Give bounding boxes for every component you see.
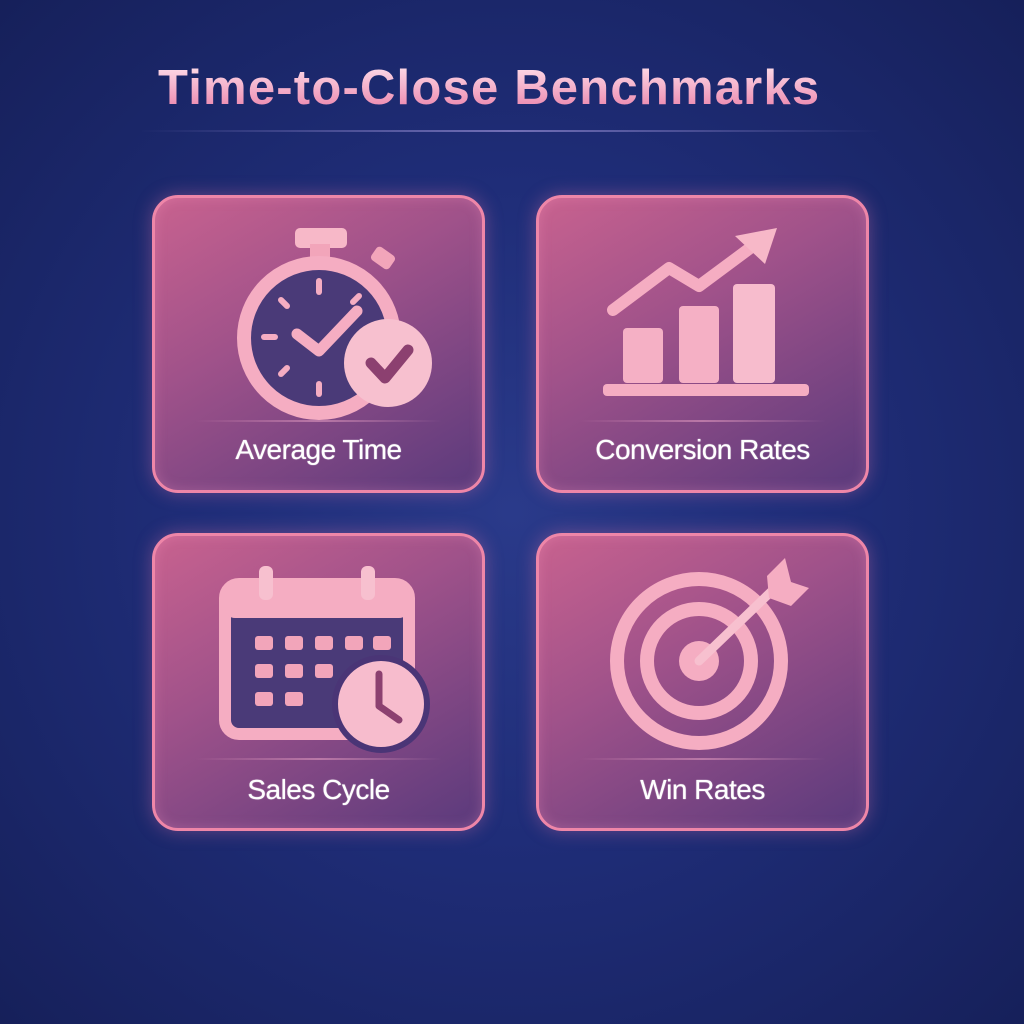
panel: sales cycle xyxy=(152,533,485,831)
icon: bar chart with arrow xyxy=(603,228,809,396)
label: Sales Cycle xyxy=(247,774,390,805)
label: Win Rates xyxy=(640,774,765,805)
title: Time-to-Close Benchmarks xyxy=(158,61,820,115)
icon: stopwatch with check xyxy=(237,228,432,420)
panel: average time xyxy=(152,195,485,493)
label: Conversion Rates xyxy=(595,434,810,465)
icon: calendar with clock xyxy=(219,566,430,753)
icon: target with arrow xyxy=(610,558,809,750)
label: Average Time xyxy=(235,434,402,465)
panel: conversion rates xyxy=(536,195,869,493)
panel: win rates xyxy=(536,533,869,831)
